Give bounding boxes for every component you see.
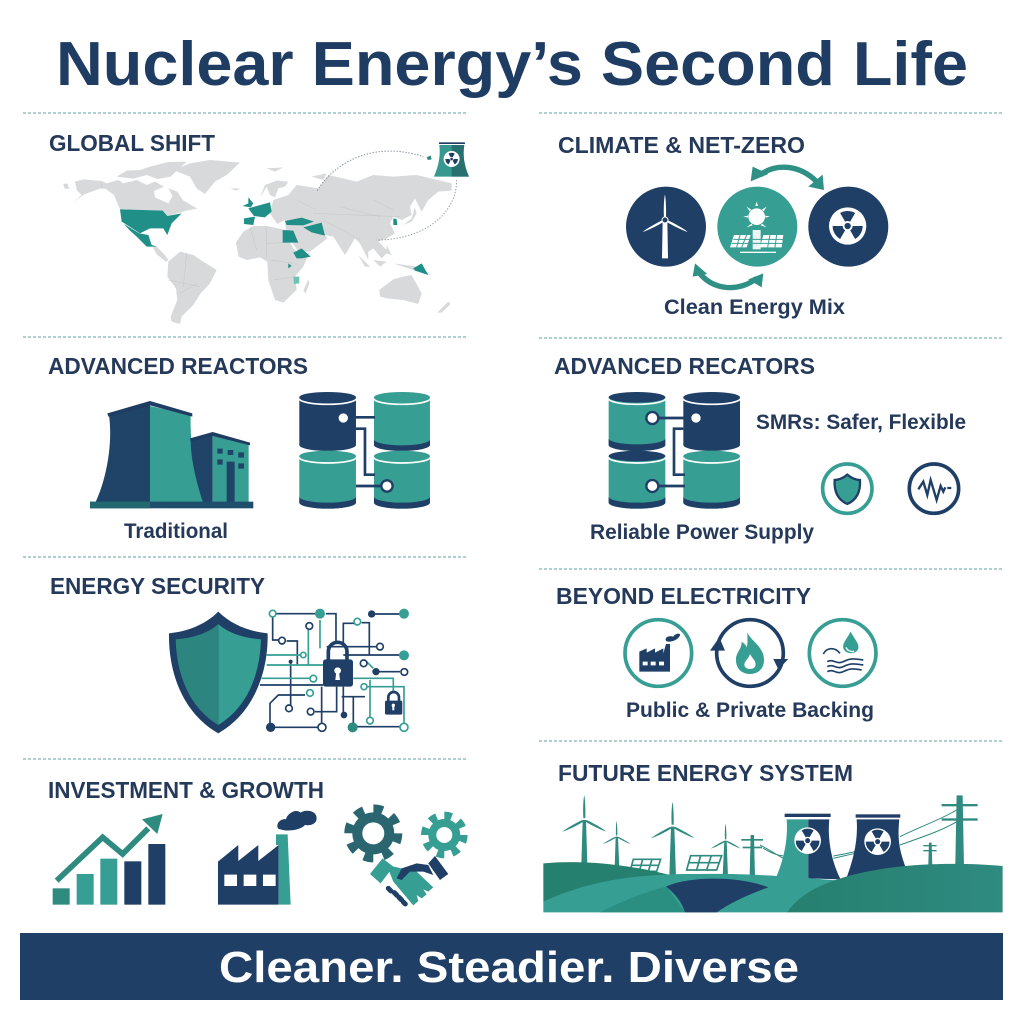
heading: future energy system: FUTURE ENERGY SYSTEM xyxy=(558,760,853,786)
icon: shield xyxy=(169,612,268,733)
panel: energy security xyxy=(50,573,409,733)
hills xyxy=(543,862,670,902)
banner xyxy=(20,933,1003,1000)
heading: global shift: GLOBAL SHIFT xyxy=(49,130,215,156)
label: smrs: SMRs: Safer, Flexible xyxy=(756,411,966,434)
label: public and private backing: Public & Private Backing xyxy=(626,699,874,722)
icon: nuclear cooling tower xyxy=(434,142,469,177)
heading: climate: CLIMATE & NET-ZERO xyxy=(558,132,805,158)
cooling towers xyxy=(775,819,808,880)
icon: traditional plant xyxy=(90,401,253,508)
icon: reliable modules xyxy=(609,392,740,509)
icon: growth chart xyxy=(53,814,165,905)
icon: factory xyxy=(218,811,317,905)
power lines xyxy=(760,810,957,858)
panel: beyond electricity xyxy=(556,583,876,722)
panel: advanced reactors left xyxy=(48,353,430,543)
icon: circuit and padlocks xyxy=(260,609,409,732)
panel: investment and growth xyxy=(48,777,464,905)
wind turbines xyxy=(562,795,741,877)
icon: linked modules xyxy=(299,392,430,509)
title: Nuclear Energy’s Second Life xyxy=(56,30,968,99)
heading: beyond electricity: BEYOND ELECTRICITY xyxy=(556,583,811,609)
icon: factory circle xyxy=(625,620,692,686)
icon: radiation xyxy=(829,207,866,245)
panel: global shift xyxy=(49,130,469,324)
banner text: Cleaner. Steadier. Diverse xyxy=(219,943,799,992)
panel: advanced recators right xyxy=(554,353,966,544)
panel: climate and net-zero xyxy=(558,132,888,319)
solar panels xyxy=(630,856,722,871)
label: reliable power supply: Reliable Power Supply xyxy=(590,521,814,544)
heading: investment and growth: INVESTMENT & GROWTH xyxy=(48,777,324,803)
icon: gears and handshake xyxy=(349,809,464,905)
icon: wind turbine xyxy=(642,195,688,258)
heading: energy security: ENERGY SECURITY xyxy=(50,573,265,599)
label: clean energy mix: Clean Energy Mix xyxy=(664,296,845,319)
illustration: landscape xyxy=(543,795,1003,912)
icon: recycling flame xyxy=(710,620,788,686)
icon: safety shield xyxy=(823,464,872,513)
icon: flexible waveform xyxy=(909,464,959,513)
world map xyxy=(63,151,457,324)
heading: advanced reactors: ADVANCED REACTORS xyxy=(48,353,308,379)
label: traditional: Traditional xyxy=(124,520,228,543)
panel: future energy system xyxy=(543,760,1003,912)
arrow: swap arcs xyxy=(698,167,817,288)
heading: advanced recators: ADVANCED RECATORS xyxy=(554,353,815,379)
icon: clean energy circles xyxy=(626,167,888,288)
icon: sun and solar panels xyxy=(730,202,783,253)
icon: water circle xyxy=(809,620,876,686)
